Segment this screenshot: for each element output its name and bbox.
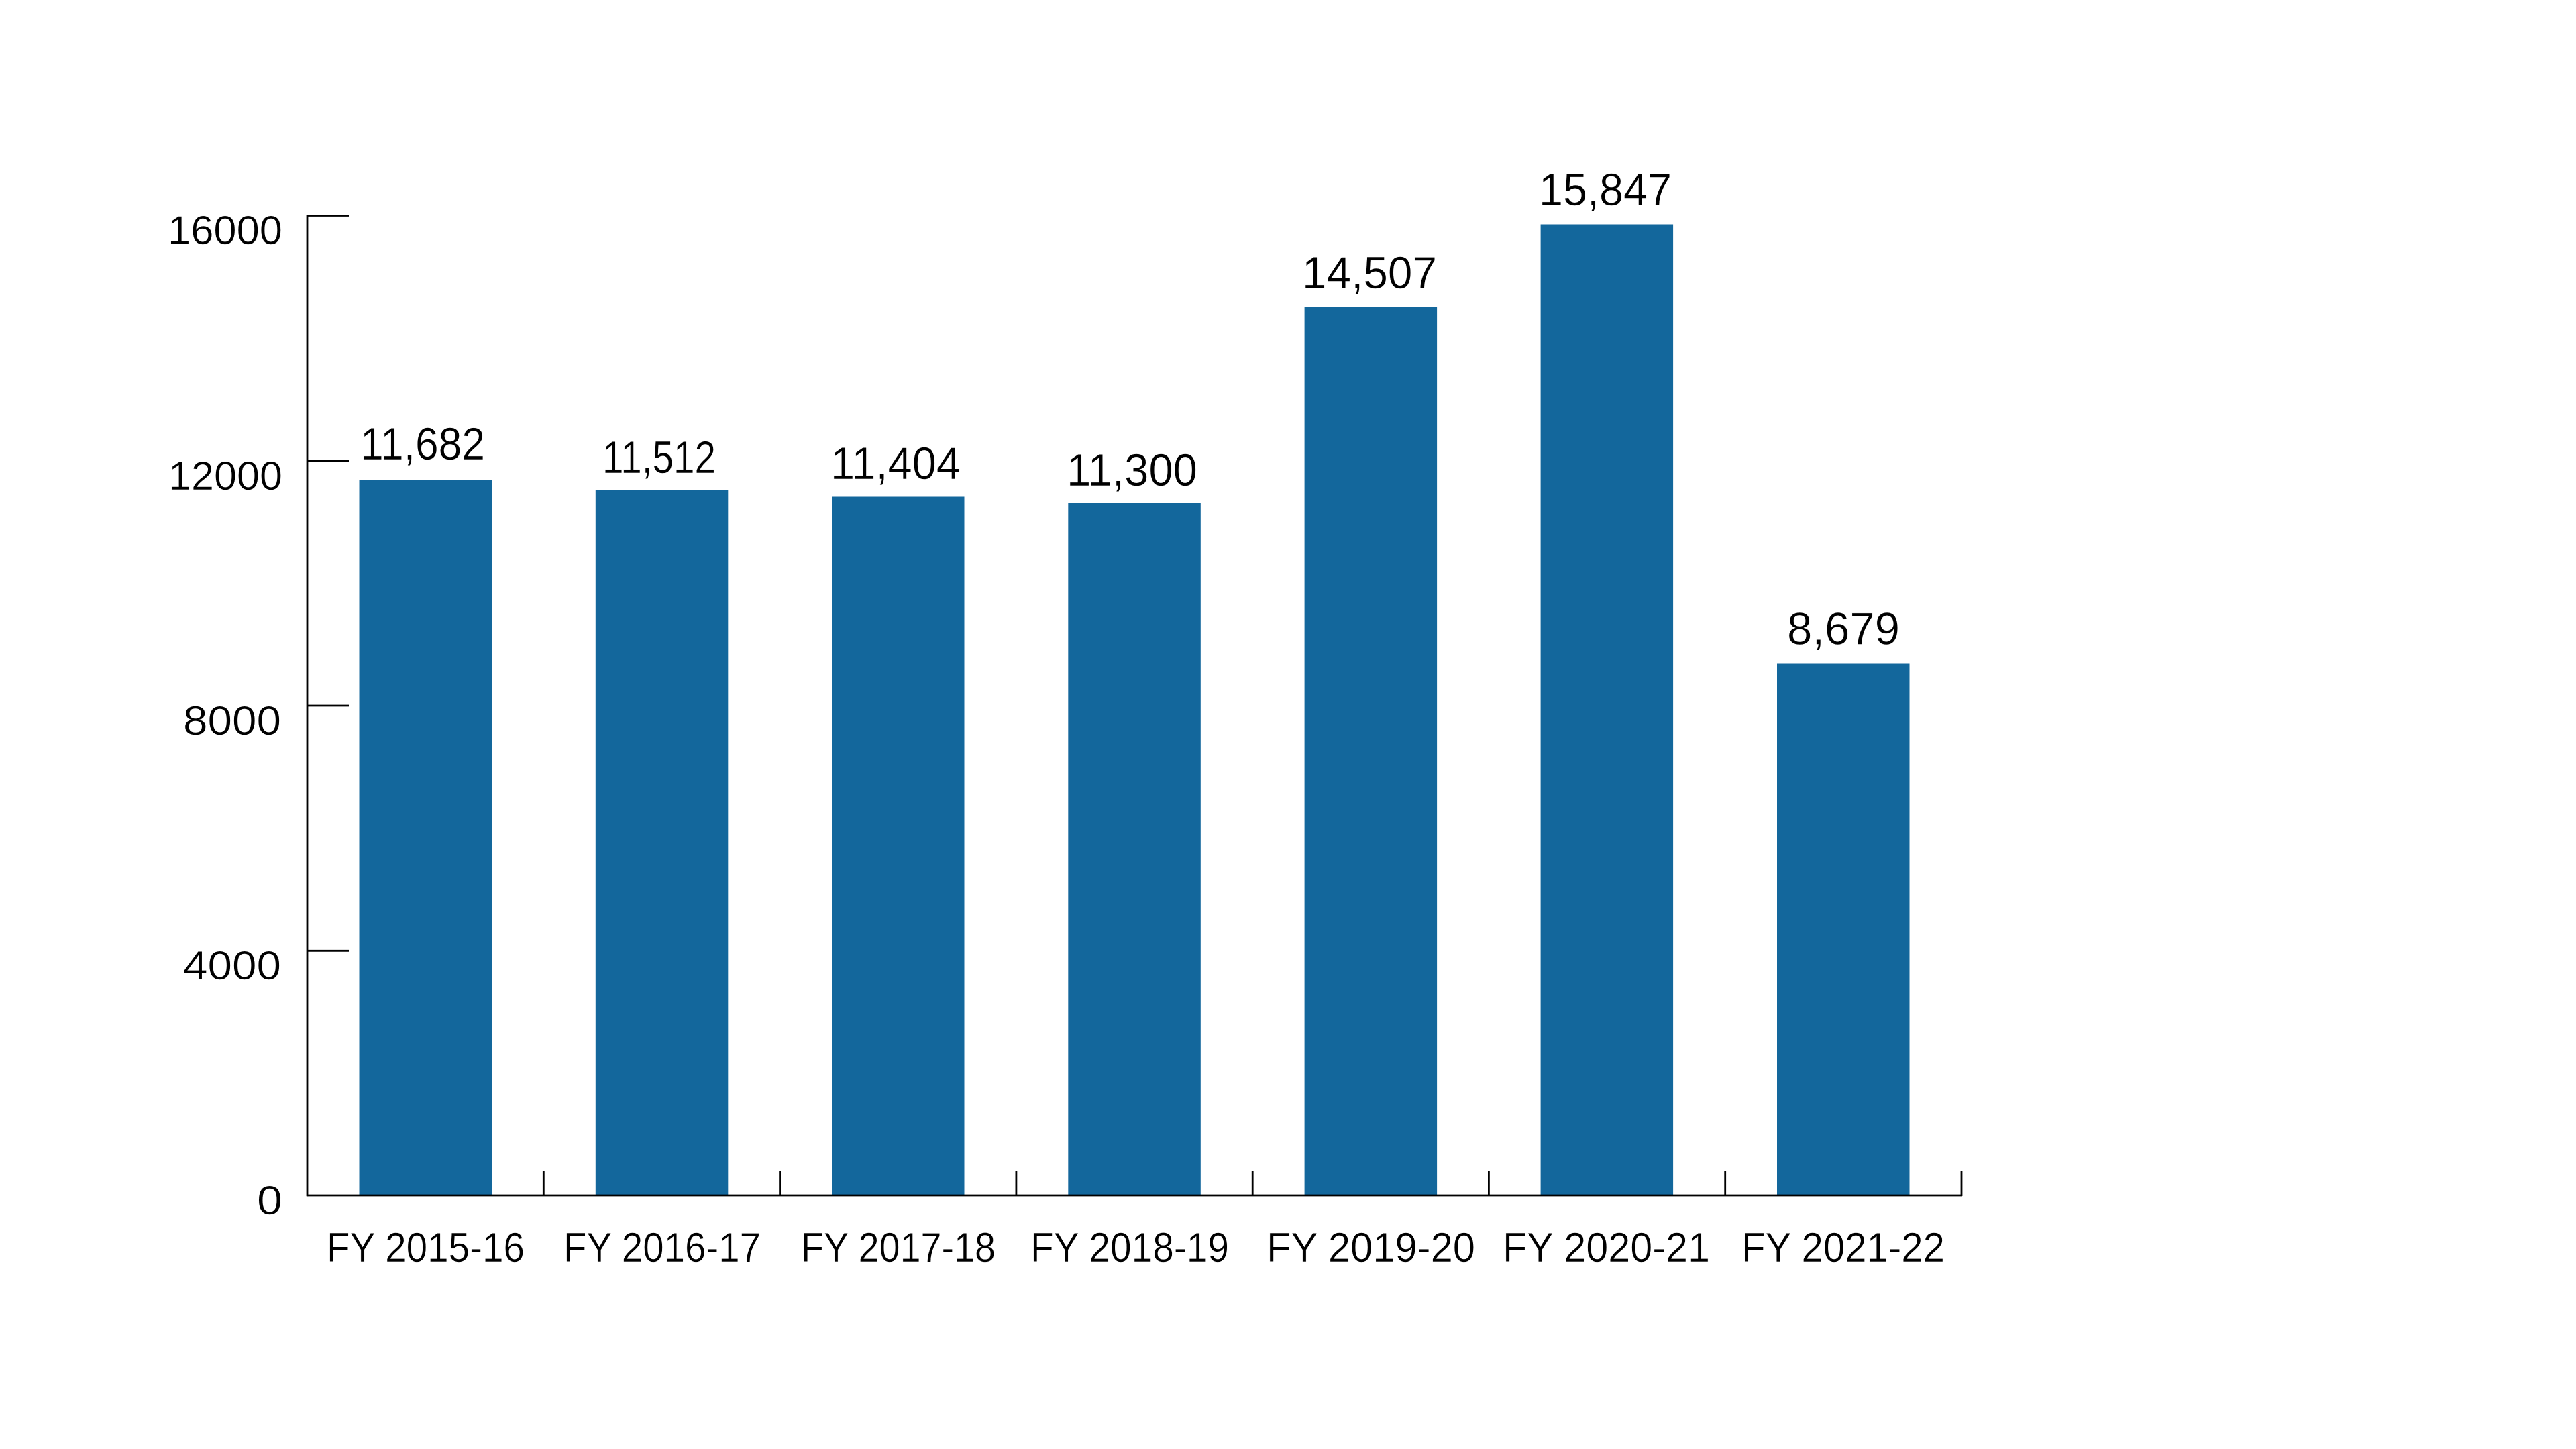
bar: FY 2018-19 <box>1068 503 1201 1195</box>
bar: FY 2019-20 <box>1305 307 1437 1195</box>
bar: FY 2016-17 <box>596 490 728 1195</box>
label 16000: 16000 <box>168 208 282 253</box>
value 11,682: 11,682 <box>360 419 485 470</box>
value 11,512: 11,512 <box>602 432 716 483</box>
category FY 2018-19: FY 2018-19 <box>1030 1225 1229 1271</box>
category FY 2016-17: FY 2016-17 <box>564 1225 761 1271</box>
category FY 2017-18: FY 2017-18 <box>801 1225 996 1271</box>
label 8000: 8000 <box>183 698 281 743</box>
value 8,679: 8,679 <box>1787 604 1900 655</box>
bar: FY 2021-22 <box>1777 664 1909 1195</box>
category FY 2021-22: FY 2021-22 <box>1741 1225 1945 1271</box>
value 11,404: 11,404 <box>830 438 961 489</box>
value 15,847: 15,847 <box>1539 164 1672 215</box>
y axis labels <box>168 208 282 1223</box>
label 12000: 12000 <box>168 453 282 498</box>
category FY 2015-16: FY 2015-16 <box>327 1225 525 1271</box>
value 11,300: 11,300 <box>1067 445 1197 496</box>
category FY 2019-20: FY 2019-20 <box>1267 1225 1475 1271</box>
bar: FY 2017-18 <box>832 496 965 1195</box>
label 4000: 4000 <box>183 943 281 988</box>
bar: FY 2015-16 <box>360 480 492 1195</box>
x axis with ticks <box>307 1171 1962 1196</box>
axes <box>307 215 1962 1196</box>
x axis labels <box>327 1225 1945 1271</box>
value 14,507: 14,507 <box>1302 248 1437 299</box>
label 0: 0 <box>257 1178 282 1223</box>
bars <box>360 224 1909 1195</box>
value labels <box>360 164 1900 655</box>
y axis with ticks <box>307 215 349 1196</box>
category FY 2020-21: FY 2020-21 <box>1503 1225 1710 1271</box>
bar: FY 2020-21 <box>1541 224 1673 1195</box>
